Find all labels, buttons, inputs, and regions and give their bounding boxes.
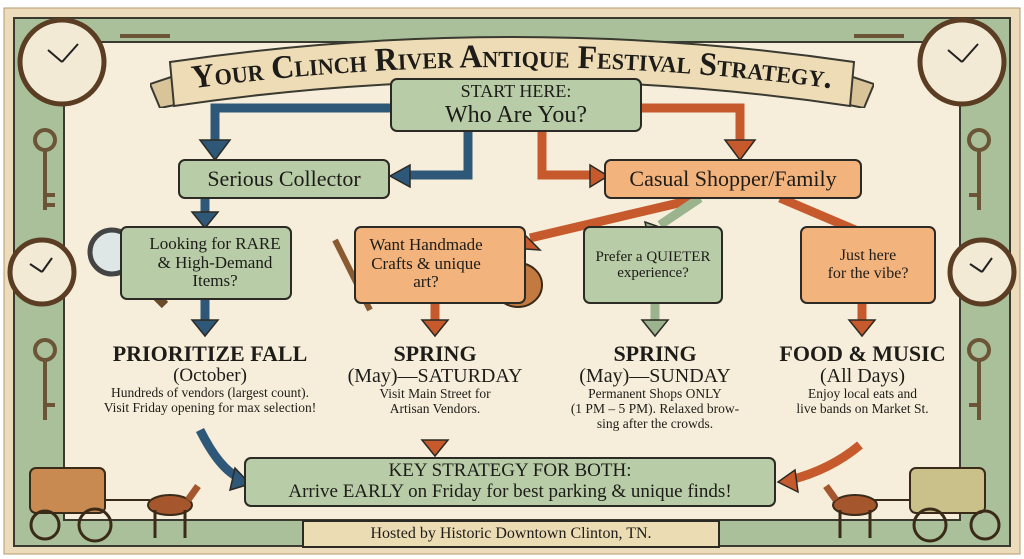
vibe box: for the vibe? [828,265,908,282]
quieter box: experience? [617,265,689,281]
handmade box: Crafts & unique [371,254,481,273]
start box [390,78,642,132]
icon: brush and pot [335,240,542,310]
spring saturday: Artisan Vendors. [390,401,480,416]
arrows [200,108,862,480]
fall column: (October) [173,365,247,386]
icon: clocks [10,20,1014,304]
spring sunday: sing after the crowds. [597,416,713,430]
vibe box: Just here [840,247,896,264]
key strategy box [244,457,776,507]
rare box [120,226,292,300]
food music: live bands on Market St. [796,401,929,416]
spring saturday: (May)—SATURDAY [348,365,522,387]
spring saturday: Visit Main Street for [379,386,491,401]
rare box: & High-Demand [158,253,272,272]
casual shopper [604,159,862,199]
icon: keys [35,36,989,420]
start box: START HERE: [461,81,571,101]
food music: (All Days) [820,365,905,387]
fall column: Hundreds of vendors (largest count). [111,385,309,400]
fall column: Visit Friday opening for max selection! [104,400,316,415]
footer ribbon [302,520,720,548]
handmade box [354,226,526,304]
spring sunday [571,341,739,431]
start box: Who Are You? [445,102,587,128]
fall column [104,341,316,415]
spring saturday [348,341,522,416]
handmade box: Want Handmade [369,235,483,254]
key strategy box: Arrive EARLY on Friday for best parking & unique finds! [288,481,732,502]
footer ribbon: Hosted by Historic Downtown Clinton, TN. [370,525,652,542]
serious collector [178,159,390,199]
food music [779,341,946,416]
spring saturday: SPRING [393,341,477,366]
food music: Enjoy local eats and [808,386,917,401]
icon: carriages [30,468,999,541]
casual shopper: Casual Shopper/Family [629,166,837,191]
quieter box: Prefer a QUIETER [596,248,710,264]
title: Your Clinch River Antique Festival Strategy. [190,46,830,88]
food music: FOOD & MUSIC [779,341,946,366]
spring sunday: SPRING [613,341,697,366]
rare box: Items? [192,271,238,290]
key strategy box: KEY STRATEGY FOR BOTH: [389,460,631,481]
spring sunday: Permanent Shops ONLY [588,386,722,401]
spring sunday: (May)—SUNDAY [579,365,731,387]
serious collector: Serious Collector [207,166,361,191]
icon: magnifier [90,230,165,305]
fall column: PRIORITIZE FALL [113,341,307,366]
spring sunday: (1 PM – 5 PM). Relaxed brow- [571,401,739,416]
quieter box [583,226,723,304]
vibe box [800,226,936,304]
rare box: Looking for RARE [149,234,281,253]
handmade box: art? [413,272,439,291]
